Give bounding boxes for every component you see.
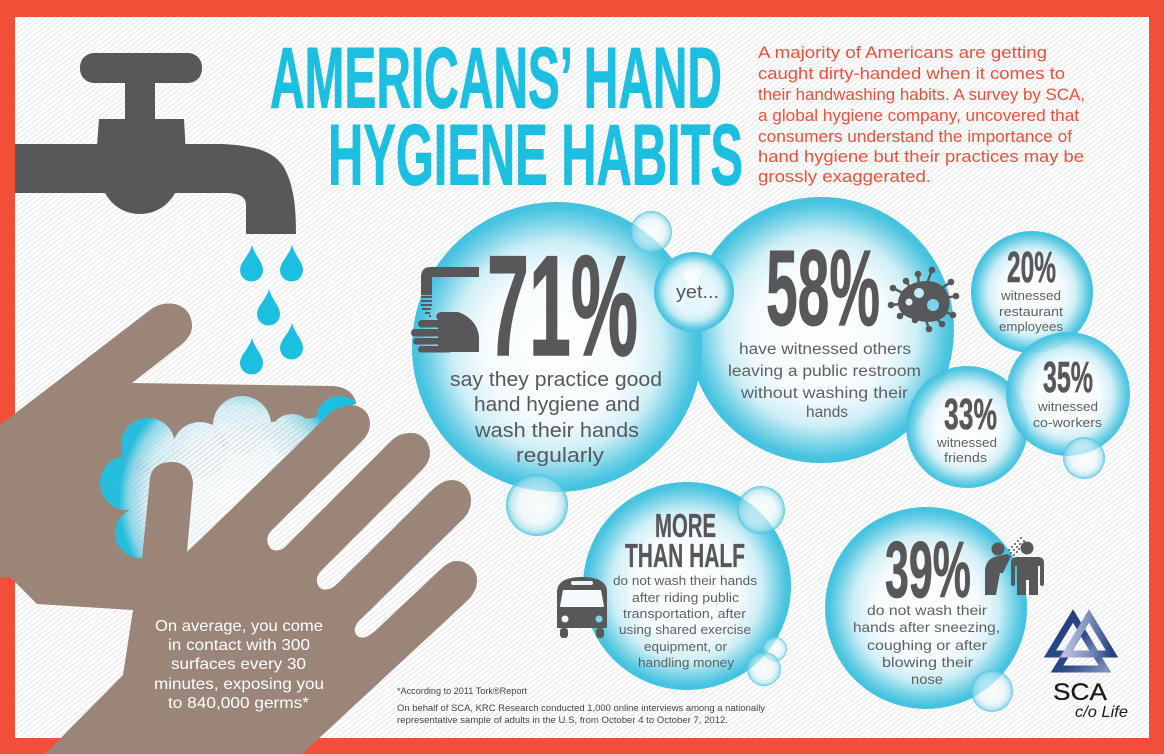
text 71: regularly bbox=[516, 445, 604, 467]
bubble: 33 percent: witnessed bbox=[936, 435, 997, 450]
text more than half: handling money bbox=[638, 655, 735, 670]
text more than half: transportation, after bbox=[623, 606, 747, 621]
intro paragraph bbox=[758, 44, 1085, 186]
bubble: small more 2 bbox=[763, 637, 787, 661]
logo wordmark: SCA bbox=[1053, 679, 1107, 706]
text 58: leaving a public restroom bbox=[728, 363, 921, 380]
thumb and fingers bbox=[45, 405, 477, 754]
bubble: 33 percent: 33% bbox=[944, 390, 997, 439]
lather bbox=[100, 396, 364, 558]
footnotes: representative sample of adults in the U.S, from October 4 to October 7, 2012. bbox=[397, 715, 728, 725]
bubble: 35 percent: witnessed bbox=[1037, 399, 1098, 414]
bubble: 39 percent: 39% bbox=[885, 525, 971, 614]
hand statistic text: On average, you come bbox=[155, 618, 323, 635]
text more than half: equipment, or bbox=[644, 639, 728, 654]
bubble: 33 percent bbox=[906, 366, 1028, 488]
bubble: 35 percent: 35% bbox=[1043, 353, 1093, 402]
title bbox=[270, 30, 743, 204]
icon: washing hands with lather bbox=[0, 303, 477, 754]
bubble: 35 percent: co-workers bbox=[1033, 415, 1103, 430]
bubble: small more 1 bbox=[737, 486, 785, 534]
stat 71: 71% bbox=[487, 227, 638, 386]
heading more than half: MORE bbox=[655, 507, 716, 544]
icon: faucet over hand bbox=[411, 267, 479, 352]
intro paragraph: their handwashing habits. A survey by SCA, bbox=[758, 86, 1085, 104]
intro paragraph: consumers understand the importance of bbox=[758, 128, 1072, 146]
bubble: 39 percent: do not wash their bbox=[867, 602, 987, 618]
bubble: small more 3 bbox=[747, 652, 781, 686]
bubble: small 39 bbox=[971, 670, 1013, 712]
bubble: yet bbox=[654, 252, 734, 332]
bubble: 20 percent: 20% bbox=[1007, 243, 1056, 292]
hand statistic text: to 840,000 germs* bbox=[168, 695, 309, 712]
hand statistic text: surfaces every 30 bbox=[171, 656, 306, 673]
hand statistic text bbox=[154, 618, 324, 712]
text more than half: using shared exercise bbox=[619, 622, 751, 637]
icon: water drops bbox=[240, 245, 303, 375]
footnotes: On behalf of SCA, KRC Research conducted 1,000 online interviews among a nationally bbox=[397, 703, 766, 713]
text 58: hands bbox=[806, 404, 848, 421]
intro paragraph: grossly exaggerated. bbox=[758, 168, 931, 186]
bubble: 39 percent: blowing their bbox=[882, 654, 973, 670]
bubble: 39 percent bbox=[825, 507, 1027, 709]
hand statistic text: minutes, exposing you bbox=[154, 676, 324, 693]
text more than half bbox=[613, 573, 758, 670]
footnotes: *According to 2011 Tork®Report bbox=[397, 686, 527, 696]
icon: faucet bbox=[15, 53, 296, 234]
bubble: small top bbox=[630, 211, 672, 253]
text 71: hand hygiene and bbox=[474, 394, 640, 416]
bubble: 39 percent: coughing or after bbox=[867, 637, 987, 653]
hand statistic text: in contact with 300 bbox=[168, 637, 310, 654]
bubble: 58 percent witnessed bbox=[688, 197, 954, 463]
bubble: 20 percent: witnessed bbox=[1000, 288, 1061, 303]
logo: SCA bbox=[1050, 616, 1128, 721]
stat 58: 58% bbox=[766, 227, 880, 348]
bubble: yet: yet... bbox=[676, 282, 719, 302]
intro paragraph: hand hygiene but their practices may be bbox=[758, 148, 1084, 166]
icon: person sneezing on another bbox=[985, 537, 1044, 595]
text 71: say they practice good bbox=[450, 369, 662, 391]
footnotes bbox=[397, 686, 766, 725]
text 71 bbox=[450, 369, 662, 467]
heading more than half: THAN HALF bbox=[625, 537, 745, 574]
bubble: small bottom bbox=[506, 474, 568, 536]
title: HYGIENE HABITS bbox=[328, 108, 743, 204]
text more than half: after riding public bbox=[632, 590, 740, 605]
bubble: 20 percent: employees bbox=[999, 319, 1064, 334]
text 58: have witnessed others bbox=[739, 341, 911, 358]
logo tagline: c/o Life bbox=[1075, 704, 1128, 721]
text 71: wash their hands bbox=[474, 420, 639, 442]
bubble: more than half bbox=[583, 482, 791, 690]
icon: bus bbox=[557, 577, 607, 638]
bubble: 35 percent bbox=[1006, 332, 1130, 456]
intro paragraph: caught dirty-handed when it comes to bbox=[758, 65, 1065, 83]
intro paragraph: a global hygiene company, uncovered that bbox=[758, 107, 1079, 125]
logo triangles bbox=[1050, 616, 1112, 669]
title: AMERICANS’ HAND bbox=[270, 30, 722, 126]
heading more than half bbox=[625, 507, 745, 574]
icon: germ bbox=[888, 267, 959, 332]
text 58: without washing their bbox=[740, 385, 908, 402]
bubble: 71 percent bbox=[412, 202, 702, 492]
text more than half: do not wash their hands bbox=[613, 573, 758, 588]
bubble: 20 percent: restaurant bbox=[999, 304, 1063, 319]
bubble: 33 percent: friends bbox=[944, 450, 988, 465]
intro paragraph: A majority of Americans are getting bbox=[758, 44, 1047, 62]
bubble: 39 percent: nose bbox=[911, 671, 943, 687]
bubble: 39 percent: hands after sneezing, bbox=[853, 619, 1000, 635]
text 58 bbox=[728, 341, 921, 421]
bubble: 20 percent bbox=[971, 231, 1093, 353]
bubble: small right bbox=[1063, 437, 1105, 479]
